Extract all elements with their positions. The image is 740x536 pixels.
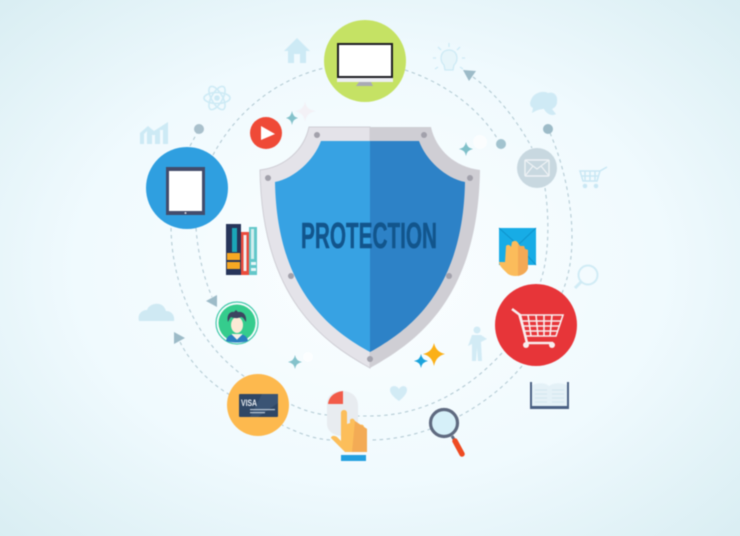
node dot inner right [496, 139, 506, 149]
icon: visa card circle: VISA [241, 398, 257, 408]
icon: faint cart [580, 167, 607, 188]
arrow: left triangle upper [206, 295, 217, 307]
icon: open book [530, 382, 569, 409]
node dot left [194, 124, 204, 134]
arrow: left triangle lower [174, 332, 185, 344]
icon: growth chart [140, 122, 168, 144]
sparkles lower left [288, 352, 313, 369]
icon: atom [204, 84, 230, 112]
icon: books [226, 224, 257, 275]
shield face [275, 141, 465, 352]
shield frame [260, 127, 480, 368]
sparkles near video [286, 101, 316, 125]
shield rivets [265, 132, 473, 362]
sparkles gold and blue [414, 343, 445, 368]
icon: lightbulb [433, 43, 465, 70]
icon: video play [250, 117, 282, 149]
icon: faint magnifier [575, 266, 598, 288]
sparkles upper right [459, 135, 487, 156]
dashed orbit lines [171, 68, 572, 440]
icon: red shopping cart circle [495, 284, 577, 366]
icon: magnifying glass [430, 410, 462, 454]
arrow: upper right triangle [463, 70, 476, 81]
icon: chat bubbles [530, 92, 557, 115]
icon: visa card circle [227, 374, 289, 436]
node dot upper right [543, 124, 553, 134]
title: PROTECTION [301, 215, 437, 256]
icon: envelope with hand [499, 228, 536, 276]
icon: mouse and pointing hand [327, 391, 367, 461]
icon: faint heart [390, 386, 407, 401]
icon: faint cloud [139, 304, 174, 321]
icon: mail circle [517, 148, 557, 188]
shield [260, 127, 480, 368]
icon: monitor circle [324, 20, 406, 102]
icon: faint person [468, 326, 487, 361]
icon: home [284, 38, 310, 63]
icon: tablet circle [146, 147, 228, 229]
icon: user avatar [216, 302, 258, 344]
